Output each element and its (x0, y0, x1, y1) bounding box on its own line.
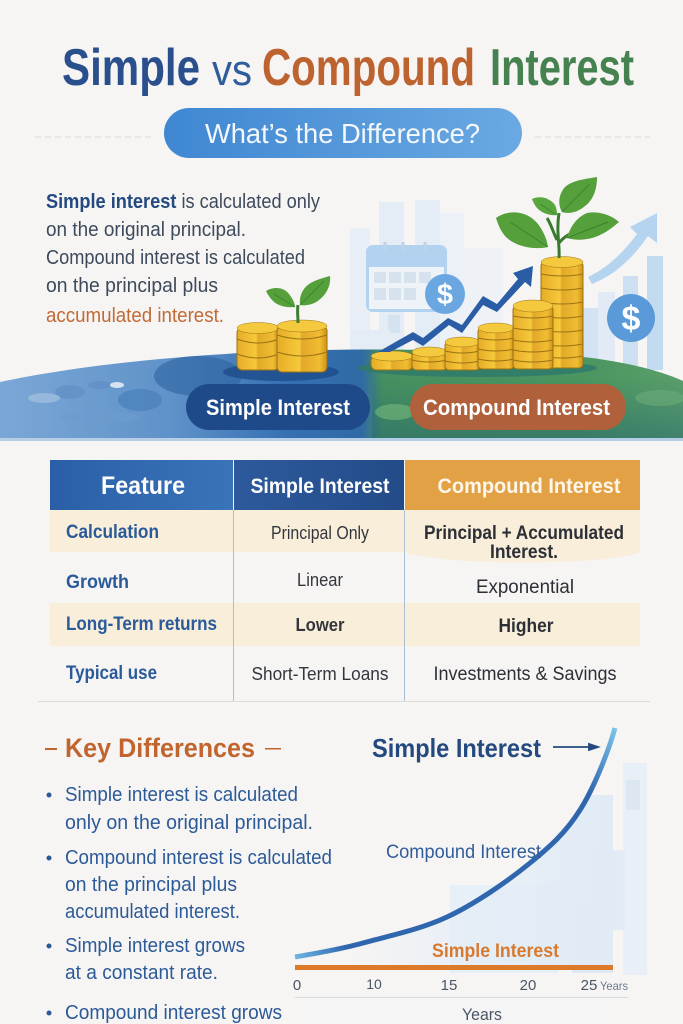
label: compound interest (410, 384, 626, 430)
table compound interest column: Interest. (490, 542, 558, 563)
key differences bullet list: at a constant rate. (65, 962, 218, 984)
intro text: on the principal plus (46, 275, 218, 297)
line label: Simple Interest (432, 941, 560, 962)
table simple interest column: Principal Only (271, 523, 369, 543)
chart area under curve (340, 795, 613, 966)
key differences bullet list: Simple interest grows (65, 935, 245, 957)
table header: Feature (101, 472, 185, 500)
chart heading with arrow: Simple Interest (372, 733, 541, 763)
x axis: Years (600, 979, 628, 993)
subtitle pill: What’s the Difference? (205, 118, 480, 149)
intro text: Simple interest is calculated only (46, 191, 320, 213)
key differences bullet list: on the principal plus (65, 874, 237, 896)
table row bands (50, 510, 640, 646)
table simple interest column: Short-Term Loans (252, 664, 388, 684)
title: Compound (262, 39, 475, 97)
key differences bullet list: Compound interest is calculated (65, 847, 332, 869)
icon: dollar coin large (607, 294, 655, 342)
icon: light growth arrow (588, 213, 657, 284)
table header (50, 460, 640, 510)
table feature column (66, 522, 217, 684)
skyline background (350, 200, 663, 370)
key differences bullet list: accumulated interest. (65, 901, 240, 923)
icon: calendar (366, 242, 447, 312)
intro text: on the original principal. (46, 219, 246, 241)
small plant (266, 276, 330, 323)
table compound interest column: Higher (498, 616, 554, 637)
compound interest curve (295, 728, 615, 957)
x axis: Years (462, 1005, 502, 1024)
table simple interest column: Linear (297, 570, 343, 590)
large plant (496, 177, 619, 258)
heading: key differences: Key Differences (65, 733, 255, 763)
x axis: 10 (366, 976, 382, 992)
x axis: 15 (441, 977, 457, 994)
x axis (293, 976, 628, 1024)
chart background bars (300, 763, 647, 1024)
title (62, 39, 634, 97)
key differences bullet list: Compound interest grows (65, 1002, 282, 1024)
subtitle pill (35, 108, 650, 158)
key differences bullet list (46, 784, 332, 1024)
simple interest line (295, 965, 613, 970)
table compound interest column: Investments & Savings (434, 664, 616, 685)
icon: dollar coin small (425, 274, 465, 314)
table compound interest column: Exponential (476, 577, 574, 598)
icon: dollar coin large: $ (622, 300, 641, 338)
simple interest coins (237, 320, 327, 372)
table feature column: Calculation (66, 522, 159, 543)
intro text: Compound interest is calculated (46, 247, 305, 269)
dark growth arrow (378, 266, 533, 352)
label: simple interest (186, 384, 370, 430)
key differences bullet list: only on the original principal. (65, 812, 313, 834)
icon: dollar coin small: $ (437, 279, 453, 311)
x axis: 25 (581, 977, 597, 994)
table header: Compound Interest (438, 475, 621, 498)
table compound interest column (424, 523, 624, 685)
table header: Simple Interest (250, 475, 390, 498)
globe (0, 349, 683, 441)
title: vs (212, 46, 252, 95)
table feature column: Growth (66, 572, 129, 593)
label: simple interest: Simple Interest (206, 395, 351, 420)
key differences bullet list: Simple interest is calculated (65, 784, 298, 806)
table feature column: Typical use (66, 663, 157, 684)
table feature column: Long-Term returns (66, 614, 217, 635)
table compound interest column: Principal + Accumulated (424, 523, 624, 544)
table simple interest column: Lower (296, 615, 344, 635)
compound interest coins (371, 256, 583, 370)
title: Simple (62, 39, 200, 97)
table simple interest column (252, 523, 388, 684)
panel: comparison table (38, 460, 650, 702)
chart: growth over years (293, 728, 647, 1024)
label: compound interest: Compound Interest (423, 395, 611, 420)
panel: hero illustration (0, 177, 683, 441)
x axis: 0 (293, 977, 301, 994)
curve label: Compound Interest (386, 842, 542, 863)
title: Interest (490, 39, 634, 97)
intro text: accumulated interest. (46, 305, 224, 327)
intro text (46, 191, 320, 327)
x axis: 20 (520, 977, 536, 994)
